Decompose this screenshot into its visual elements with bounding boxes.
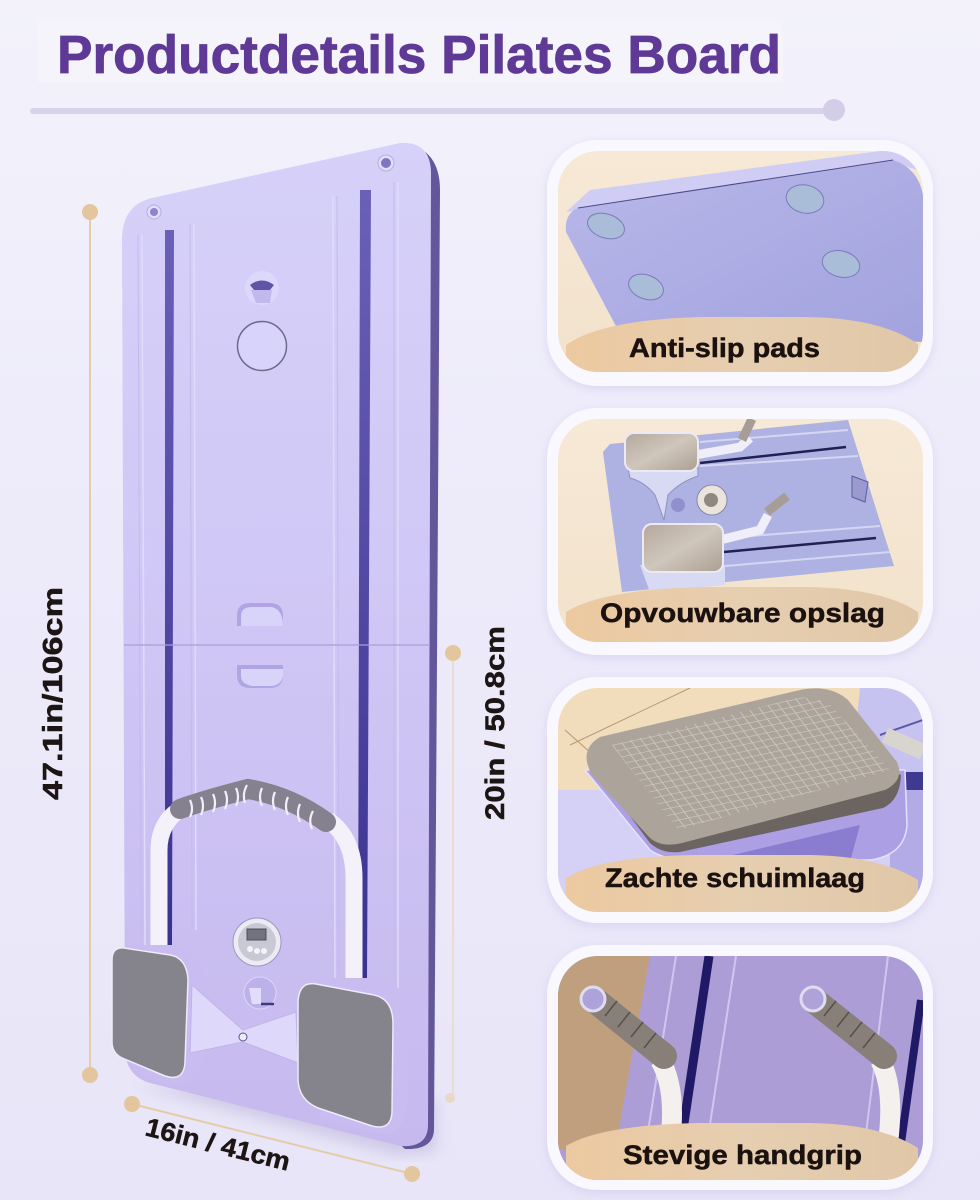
dimension: height 20in [445, 626, 510, 1103]
grooves [648, 956, 889, 1129]
board side edge [395, 143, 440, 1149]
rubber pads [584, 181, 863, 304]
panel: opvouwbare opslag [547, 408, 933, 655]
fold line [124, 644, 430, 646]
pad joints [628, 468, 698, 520]
caption band [566, 587, 918, 642]
right roller [801, 987, 884, 1056]
board underside [566, 160, 923, 342]
caption band [566, 855, 918, 912]
slots [700, 447, 876, 552]
bow connector [190, 985, 298, 1063]
timer [233, 918, 281, 966]
right pad base [305, 978, 408, 1135]
foam grip [180, 785, 326, 829]
left roller [581, 987, 664, 1056]
bolt [671, 485, 727, 515]
pad base [585, 770, 907, 860]
floor lilac [558, 790, 890, 912]
caption band [566, 1123, 918, 1180]
dimension: height 47.1in [37, 204, 98, 1083]
board behind [858, 688, 923, 772]
grips [742, 419, 787, 512]
foam grid [612, 697, 890, 830]
dimension: width 16in: 16in / 41cm [143, 1112, 293, 1177]
foam plate top [587, 688, 899, 845]
dimension: height 20in: 20in / 50.8cm [480, 626, 510, 820]
notch [852, 476, 868, 502]
board top face [122, 143, 431, 1146]
white handle tube [159, 808, 354, 985]
left foot pad [112, 948, 188, 1077]
folded board [603, 420, 894, 592]
caption band [566, 317, 918, 372]
left pad base [130, 945, 206, 1085]
fold notches [237, 603, 283, 688]
right foot pad [298, 984, 393, 1127]
tan background [558, 956, 650, 1150]
caption: Opvouwbare opslag [600, 598, 885, 628]
left slot [165, 230, 174, 945]
panel: stevige handgrip [547, 945, 933, 1190]
white tubes [660, 1060, 890, 1150]
dimension: height 47.1in: 47.1in/106cm [37, 587, 68, 800]
caption: Stevige handgrip [623, 1140, 862, 1170]
right slot [358, 190, 371, 980]
pilates board product [112, 143, 440, 1155]
upper knob recess [245, 271, 279, 305]
board edge [566, 151, 923, 212]
floor lines [564, 688, 690, 751]
lower knob recess [244, 977, 276, 1009]
panel: anti-slip pads [547, 140, 933, 386]
board shadow [135, 1085, 436, 1155]
joint [239, 1033, 247, 1041]
folded pads [625, 433, 698, 471]
title: Productdetails Pilates Board [57, 25, 781, 85]
caption: Zachte schuimlaag [605, 863, 865, 893]
dimension: width 16in [124, 1096, 420, 1182]
dark slots [680, 956, 709, 1150]
caption: Anti-slip pads [629, 333, 820, 363]
title divider with dot [30, 99, 845, 121]
round button [238, 322, 286, 370]
edge line [578, 160, 893, 208]
panel: zachte schuimlaag [547, 677, 933, 923]
white tubes [695, 438, 768, 540]
board grooves [138, 182, 398, 1000]
foam plate edge [629, 774, 901, 852]
corner holes [147, 155, 394, 219]
grey tube [885, 735, 923, 752]
